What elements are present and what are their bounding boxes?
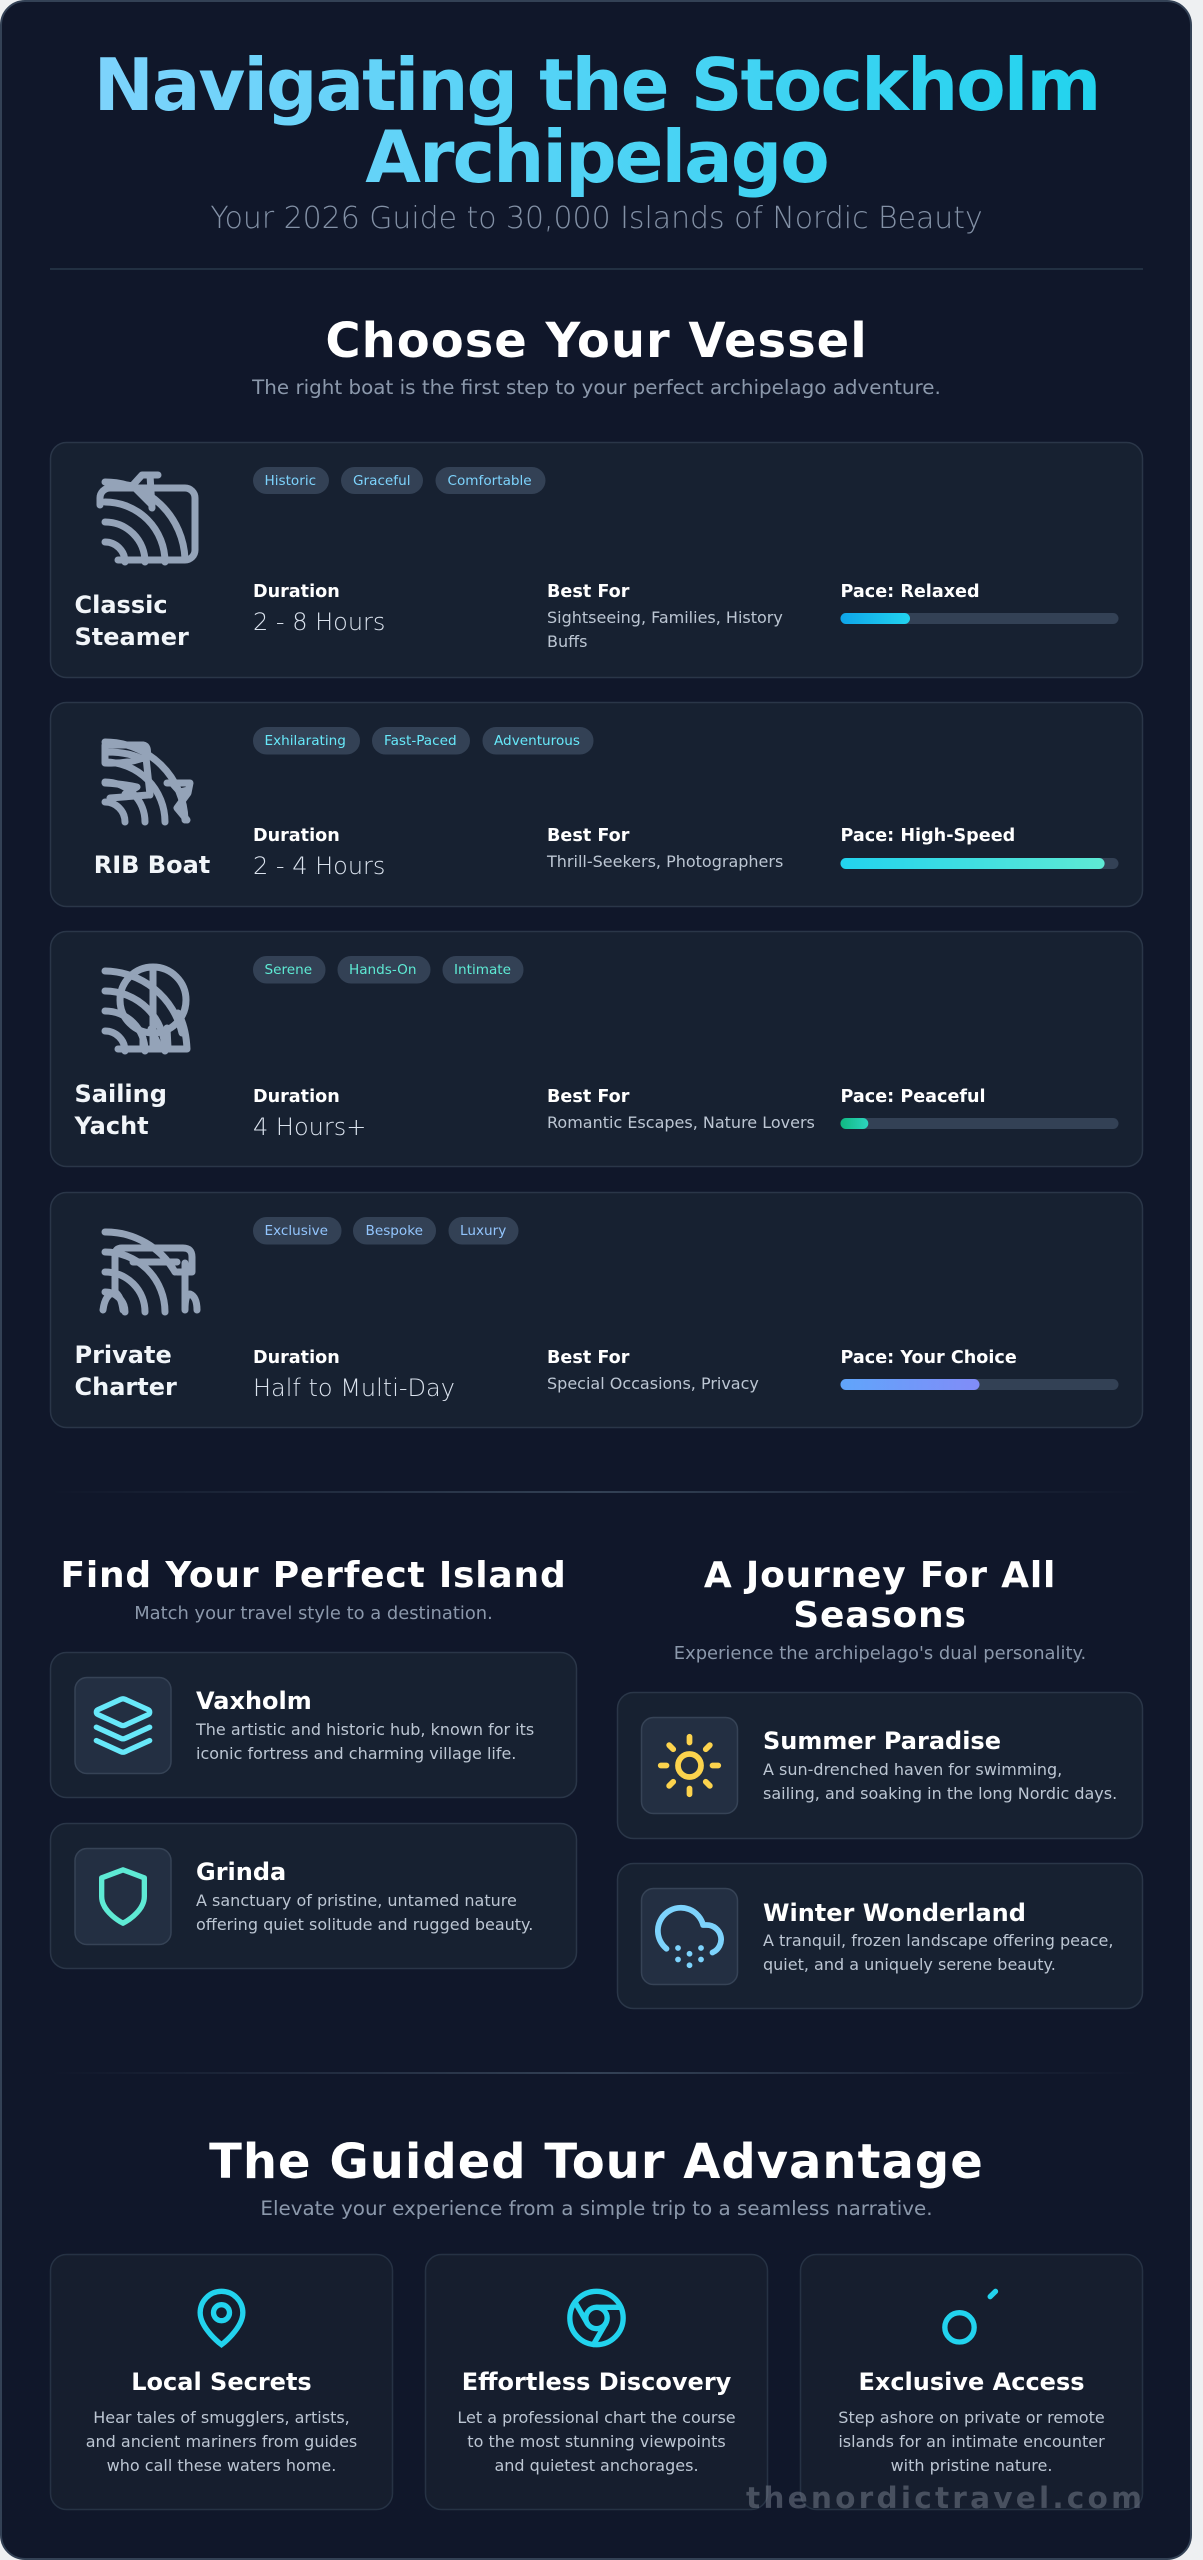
duration xyxy=(253,1087,366,1141)
duration xyxy=(253,582,385,636)
card text: Let a professional chart the course xyxy=(457,2408,736,2427)
panel: Private Charter xyxy=(50,1192,1142,1428)
best for: Best For xyxy=(547,1348,630,1368)
heading: A Journey For All Seasons: A Journey For All xyxy=(704,1555,1056,1596)
duration: Half to Multi-Day xyxy=(253,1374,455,1402)
icon: private charter xyxy=(100,1228,200,1316)
heading: The Guided Tour Advantage xyxy=(209,2134,984,2220)
duration: 2 - 4 Hours xyxy=(253,852,385,880)
card title: Effortless Discovery xyxy=(462,2368,732,2396)
vessel name xyxy=(74,1080,167,1140)
duration: Duration xyxy=(253,1087,340,1107)
tags: Hands-On xyxy=(349,962,416,978)
heading: A Journey For All Seasons: Experience the archipelago's dual personality. xyxy=(674,1643,1086,1664)
duration: 2 - 8 Hours xyxy=(253,608,385,636)
text: Grinda: Grinda xyxy=(196,1858,286,1886)
icon: shield xyxy=(75,1848,171,1944)
best for: Best For xyxy=(547,826,630,846)
tags: Fast-Paced xyxy=(384,733,457,749)
panel: Winter Wonderland xyxy=(618,1864,1142,2008)
pace: Pace: Your Choice xyxy=(840,1348,1017,1368)
title second line: Archipelago xyxy=(365,115,828,199)
text: Winter Wonderland: quiet, and a uniquely serene beauty. xyxy=(763,1955,1056,1974)
icon: layers xyxy=(75,1678,171,1774)
tags: Comfortable xyxy=(448,473,532,489)
tags: Exclusive xyxy=(264,1223,328,1239)
vessel name: Private xyxy=(74,1341,172,1369)
pace xyxy=(840,1348,1118,1390)
panel: RIB Boat xyxy=(50,702,1142,906)
duration: Duration xyxy=(253,582,340,602)
panel: Exclusive Access xyxy=(800,2254,1142,2510)
card text: and ancient mariners from guides xyxy=(86,2432,357,2451)
card text: Step ashore on private or remote xyxy=(838,2408,1105,2427)
tags xyxy=(253,727,594,754)
heading: Find Your Perfect Island: Find Your Perfect Island xyxy=(60,1555,567,1596)
pace xyxy=(840,582,1118,624)
best for xyxy=(547,1348,759,1393)
text: Grinda: offering quiet solitude and rugged beauty. xyxy=(196,1915,533,1934)
text: Grinda: A sanctuary of pristine, untamed nature xyxy=(196,1891,517,1910)
card text: who call these waters home. xyxy=(107,2456,336,2475)
tags xyxy=(253,956,524,984)
best for: Special Occasions, Privacy xyxy=(547,1374,759,1393)
pace xyxy=(840,1087,1118,1129)
vessel name: Charter xyxy=(74,1373,177,1401)
heading: The Guided Tour Advantage: The Guided Tour Advantage xyxy=(209,2134,984,2190)
panel: Summer Paradise xyxy=(618,1692,1142,1838)
best for: Romantic Escapes, Nature Lovers xyxy=(547,1113,815,1132)
text: Summer Paradise: A sun-drenched haven for swimming, xyxy=(763,1760,1062,1779)
heading: Choose Your Vessel xyxy=(251,313,941,399)
vessel name xyxy=(74,591,189,651)
tags xyxy=(253,1217,518,1244)
heading: A Journey For All Seasons xyxy=(674,1555,1086,1664)
tags: Exhilarating xyxy=(264,733,346,749)
pace xyxy=(840,826,1118,869)
pace: Pace: Relaxed xyxy=(840,582,980,602)
tags: Bespoke xyxy=(366,1223,423,1239)
pace: Pace: Peaceful xyxy=(840,1087,986,1107)
heading: A Journey For All Seasons: Seasons xyxy=(793,1595,967,1636)
best for: Sightseeing, Families, History xyxy=(547,608,783,627)
text: Vaxholm: Vaxholm xyxy=(196,1687,312,1715)
best for: Thrill-Seekers, Photographers xyxy=(546,852,783,871)
duration: 4 Hours+ xyxy=(253,1113,366,1141)
heading: The Guided Tour Advantage: Elevate your experience from a simple trip to a seamless narrative. xyxy=(260,2197,933,2220)
duration: Duration xyxy=(253,1348,340,1368)
vessel name: Yacht xyxy=(74,1112,149,1140)
icon: key xyxy=(942,2288,998,2345)
heading: Choose Your Vessel: Choose Your Vessel xyxy=(325,313,868,369)
best for xyxy=(546,826,783,871)
card title: Exclusive Access xyxy=(858,2368,1085,2396)
card text: islands for an intimate encounter xyxy=(838,2432,1105,2451)
best for xyxy=(547,582,783,651)
icon: chrome compass xyxy=(567,2288,626,2348)
best for: Buffs xyxy=(547,632,587,651)
card text xyxy=(86,2408,357,2475)
card text: with pristine nature. xyxy=(891,2456,1052,2475)
heading: Find Your Perfect Island: Match your travel style to a destination. xyxy=(134,1603,493,1624)
icon: sailing yacht xyxy=(102,964,190,1054)
tags: Adventurous xyxy=(494,733,580,749)
icon: map pin xyxy=(198,2288,246,2348)
panel: Grinda xyxy=(50,1824,576,1968)
subtitle: Your 2026 Guide to 30,000 Islands of Nordic Beauty xyxy=(210,201,983,236)
icon: sun xyxy=(642,1718,738,1814)
duration xyxy=(253,826,385,880)
duration: Duration xyxy=(253,826,340,846)
tags: Serene xyxy=(264,962,312,978)
tags: Graceful xyxy=(353,473,410,489)
text: Vaxholm: The artistic and historic hub, known for its xyxy=(195,1720,534,1739)
text: Summer Paradise xyxy=(763,1727,1117,1803)
tags: Intimate xyxy=(454,962,511,978)
tags xyxy=(253,467,546,494)
tags: Luxury xyxy=(460,1223,506,1239)
vessel name xyxy=(74,1341,177,1401)
card text xyxy=(457,2408,736,2475)
pace: Pace: High-Speed xyxy=(840,826,1015,846)
heading: Choose Your Vessel: The right boat is the first step to your perfect archipelago adventure. xyxy=(251,376,941,399)
best for xyxy=(547,1087,815,1132)
text: Winter Wonderland: A tranquil, frozen landscape offering peace, xyxy=(763,1931,1113,1950)
text: Summer Paradise: Summer Paradise xyxy=(763,1727,1001,1755)
text: Winter Wonderland: Winter Wonderland xyxy=(763,1899,1026,1927)
card text: Hear tales of smugglers, artists, xyxy=(93,2408,350,2427)
panel: Classic Steamer xyxy=(50,442,1142,678)
card title: Local Secrets xyxy=(131,2368,312,2396)
panel: Local Secrets xyxy=(50,2254,392,2510)
icon: cloud snow xyxy=(642,1888,738,1984)
icon: rib boat xyxy=(102,738,194,826)
vessel name: Steamer xyxy=(74,623,189,651)
text: Vaxholm: iconic fortress and charming village life. xyxy=(196,1744,516,1763)
vessel name: Sailing xyxy=(74,1080,167,1108)
icon: classic steamer xyxy=(96,472,198,566)
text: Vaxholm xyxy=(195,1687,534,1763)
panel: Effortless Discovery xyxy=(426,2254,768,2510)
watermark: thenordictravel.com xyxy=(746,2481,1145,2515)
heading: Find Your Perfect Island xyxy=(60,1555,567,1624)
card text xyxy=(838,2408,1105,2475)
tags: Historic xyxy=(264,473,316,489)
best for: Best For xyxy=(547,1087,630,1107)
vessel name: Classic xyxy=(74,591,168,619)
duration xyxy=(253,1348,455,1402)
card text: to the most stunning viewpoints xyxy=(467,2432,726,2451)
text: Winter Wonderland xyxy=(763,1899,1113,1974)
text: Grinda xyxy=(196,1858,533,1934)
card text: and quietest anchorages. xyxy=(494,2456,699,2475)
panel: Vaxholm xyxy=(50,1652,576,1798)
panel: Sailing Yacht xyxy=(50,932,1142,1166)
best for: Best For xyxy=(547,582,630,602)
title: Navigating the Stockholm xyxy=(94,43,1099,127)
header xyxy=(94,43,1099,236)
text: Summer Paradise: sailing, and soaking in the long Nordic days. xyxy=(763,1784,1117,1803)
vessel name: RIB Boat xyxy=(94,851,210,879)
